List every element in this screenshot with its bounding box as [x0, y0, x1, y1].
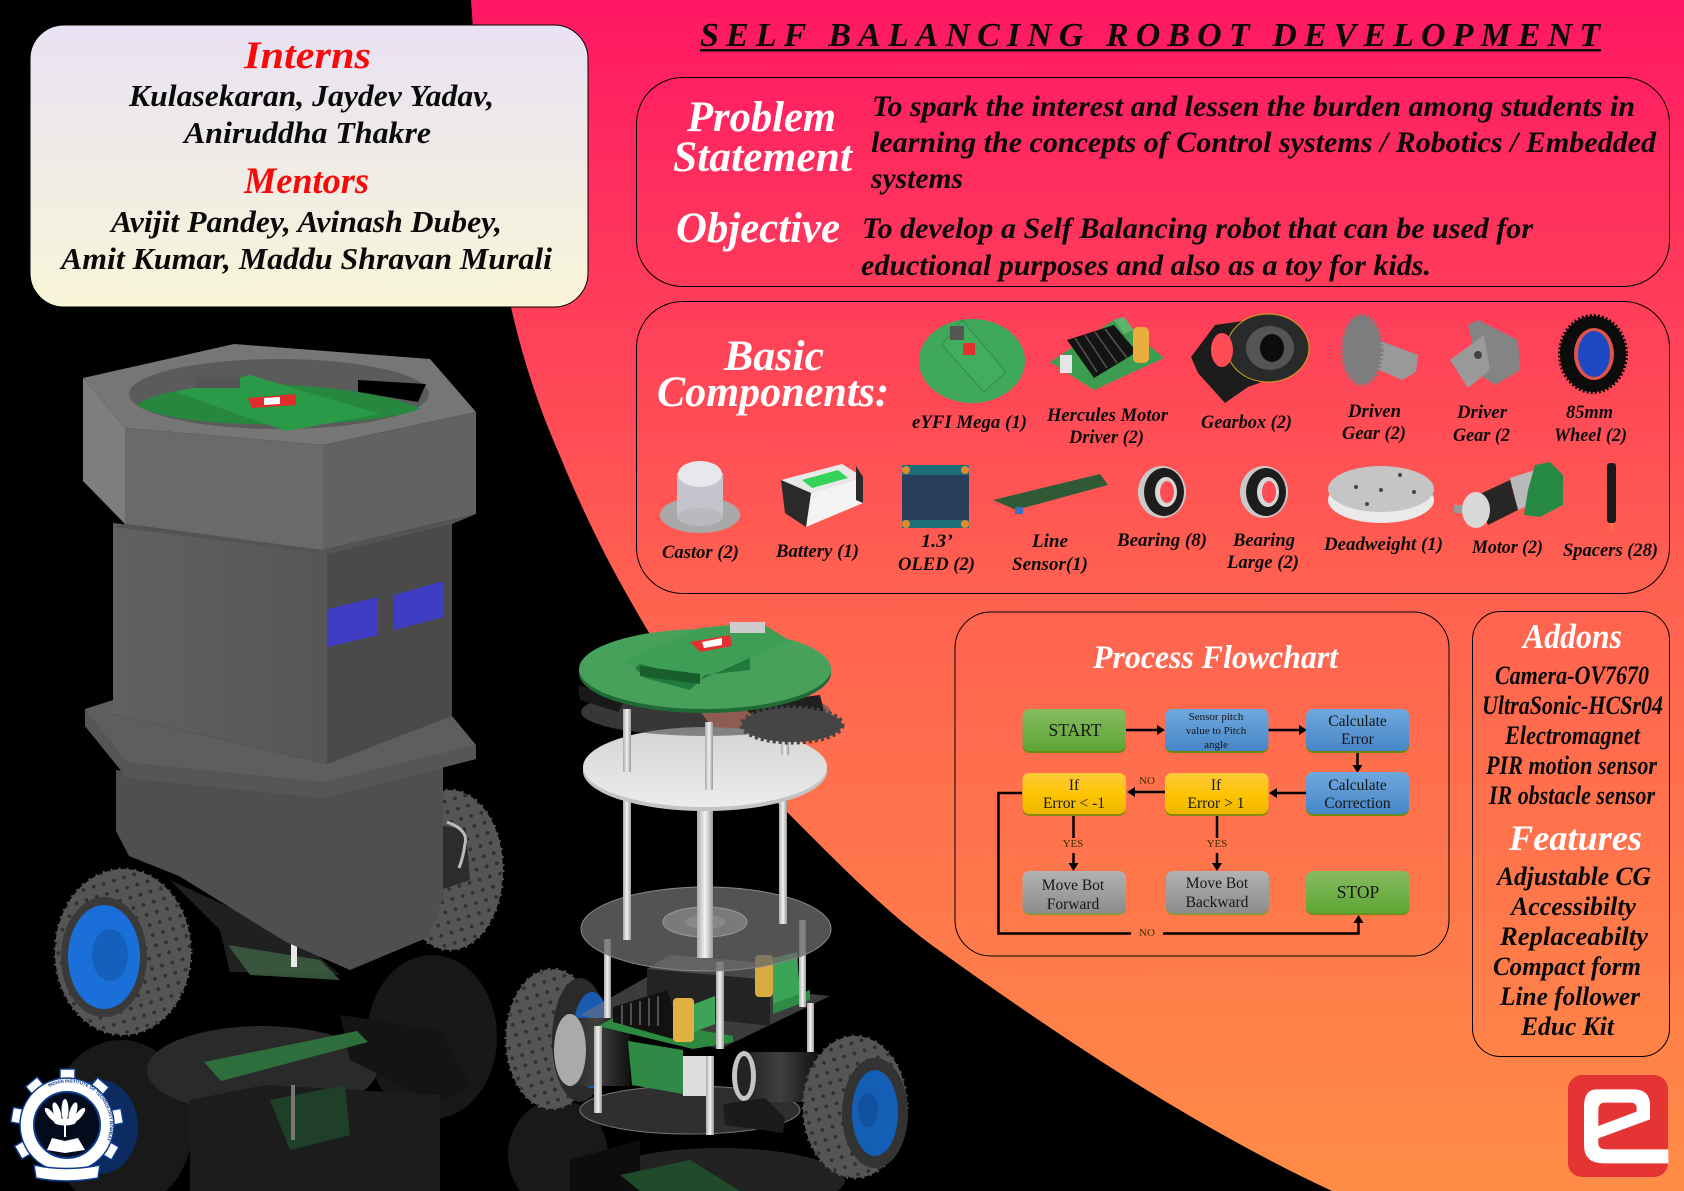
box: calculate correction	[1306, 772, 1409, 816]
box: if error greater than 1	[1165, 773, 1268, 816]
gearbox layer	[578, 685, 842, 790]
component: Motor: Motor (2)	[1471, 537, 1543, 558]
objective text	[861, 212, 1533, 282]
intern names: Kulasekaran, Jaydev Yadav,	[128, 78, 494, 113]
white disc	[583, 727, 827, 811]
component: OLED: 1.3’	[921, 531, 953, 552]
blue sensor windows	[328, 597, 378, 647]
box: move bot forward: Forward	[1047, 896, 1100, 913]
component: Wheel: Wheel (2)	[1554, 425, 1627, 446]
box: START	[1022, 709, 1126, 753]
enclosed robot render	[55, 344, 503, 1035]
heading: basic components	[657, 333, 889, 416]
features list: Line follower	[1499, 982, 1641, 1011]
component: Battery: Battery (1)	[775, 541, 859, 562]
box: START: START	[1049, 720, 1102, 740]
panel: interns and mentors	[30, 25, 588, 307]
gear outline	[11, 1069, 124, 1172]
component: Wheel: 85mm	[1566, 402, 1613, 423]
flow connectors	[998, 725, 1364, 934]
box: sensor pitch: angle	[1204, 739, 1228, 751]
box: calculate error	[1306, 709, 1409, 753]
component: Deadweight	[1323, 466, 1443, 555]
addons list: Camera-OV7670	[1495, 661, 1649, 690]
box: calculate error: Calculate	[1328, 713, 1387, 730]
features list: Replaceabilty	[1499, 922, 1648, 951]
objective text: eductional purposes and also as a toy for kids.	[861, 249, 1431, 282]
component: eYFI Mega: eYFI Mega (1)	[912, 412, 1027, 433]
component: Line Sensor: Line	[1031, 531, 1069, 552]
objective text: To develop a Self Balancing robot that can be used for	[862, 212, 1533, 245]
component: Castor	[660, 461, 740, 563]
motto ribbon	[34, 1165, 100, 1181]
panel: problem statement and objective	[636, 78, 1670, 286]
heading: problem statement: Statement	[673, 134, 854, 181]
mentor names	[59, 204, 552, 276]
heading: problem statement	[673, 94, 854, 181]
lower body	[116, 764, 443, 970]
component: Bearing Large: Large (2)	[1226, 552, 1299, 573]
component: OLED	[898, 465, 975, 575]
box: STOP	[1306, 871, 1410, 915]
flow labels: YES	[1207, 838, 1227, 850]
component: Motor	[1454, 462, 1563, 558]
component: Hercules Motor Driver: Hercules Motor	[1046, 405, 1169, 426]
heading: features: Features	[1508, 818, 1642, 858]
component: Hercules Motor Driver: Driver (2)	[1068, 427, 1144, 448]
box: move bot backward	[1166, 871, 1269, 915]
problem text: systems	[870, 162, 963, 195]
component: Castor: Castor (2)	[662, 542, 739, 563]
heading: problem statement: Problem	[686, 94, 836, 141]
component: Line Sensor: Sensor(1)	[1012, 554, 1088, 575]
reflection of enclosed robot	[49, 955, 497, 1191]
features list: Compact form	[1493, 952, 1641, 981]
exploded robot render	[506, 622, 908, 1178]
flow labels	[1063, 775, 1227, 939]
opening with green board	[129, 359, 429, 429]
ring text: INDIAN INSTITUTE OF TECHNOLOGY BOMBAY	[48, 1079, 114, 1142]
intern names	[128, 78, 494, 150]
rear wheel	[397, 790, 503, 950]
component: Bearing	[1116, 466, 1207, 551]
addons list: Electromagnet	[1504, 721, 1641, 750]
component: Line Sensor	[993, 474, 1108, 575]
component: Wheel	[1554, 316, 1627, 446]
component: Bearing: Bearing (8)	[1116, 530, 1207, 551]
box: if error less than -1	[1022, 773, 1126, 816]
component: Driver Gear: Gear (2	[1453, 425, 1510, 446]
box: if error less than -1: If	[1069, 777, 1080, 794]
title: SELF BALANCING ROBOT DEVELOPMENT	[700, 17, 1601, 54]
translucent gray disc	[581, 887, 831, 971]
box: sensor pitch	[1165, 709, 1268, 753]
box: sensor pitch: value to Pitch	[1186, 725, 1247, 737]
component: Driven Gear	[1342, 316, 1418, 444]
box: move bot backward: Move Bot	[1186, 875, 1249, 892]
component: Gearbox: Gearbox (2)	[1201, 412, 1292, 433]
box: calculate correction: Calculate	[1328, 777, 1387, 794]
component: OLED: OLED (2)	[898, 554, 975, 575]
addons list	[1482, 661, 1663, 810]
mentor names: Avijit Pandey, Avinash Dubey,	[109, 204, 502, 239]
component: eYFI Mega	[912, 319, 1027, 433]
heading: basic components: Basic	[723, 333, 824, 380]
box: move bot forward: Move Bot	[1042, 877, 1105, 894]
heading: addons: Addons	[1521, 617, 1622, 656]
intern names: Aniruddha Thakre	[182, 115, 431, 150]
middle body	[113, 523, 327, 764]
component: Gearbox	[1191, 314, 1309, 433]
component: Driven Gear: Driven	[1347, 401, 1401, 422]
features list: Educ Kit	[1520, 1012, 1615, 1041]
problem text	[870, 90, 1657, 195]
features list: Adjustable CG	[1495, 862, 1651, 891]
panel: addons and features	[1472, 612, 1670, 1056]
logo: IIT Bombay	[10, 1068, 138, 1182]
box: calculate correction: Correction	[1324, 795, 1391, 812]
long rods	[623, 798, 787, 958]
top octagon	[83, 344, 476, 445]
lotus and book	[43, 1099, 87, 1153]
mentor names: Amit Kumar, Maddu Shravan Murali	[59, 241, 552, 276]
component: Bearing Large: Bearing	[1232, 530, 1295, 551]
component: Driven Gear: Gear (2)	[1342, 423, 1406, 444]
panel: process flowchart	[955, 612, 1449, 956]
problem text: learning the concepts of Control systems / Robotics / Embedded	[871, 126, 1657, 159]
box: calculate error: Error	[1341, 731, 1375, 748]
flow labels: NO	[1139, 927, 1155, 939]
flange	[85, 700, 476, 798]
box: move bot backward: Backward	[1186, 894, 1249, 911]
component: Battery	[775, 464, 863, 562]
component: Spacers	[1563, 463, 1658, 561]
panel: basic components	[636, 302, 1670, 594]
logo: e-Yantra	[1568, 1075, 1668, 1177]
undercarriage	[170, 880, 340, 975]
front-left wheel	[55, 869, 191, 1035]
lower chassis	[506, 920, 908, 1178]
features list: Accessibilty	[1509, 892, 1636, 921]
component: Driver Gear: Driver	[1456, 402, 1508, 423]
heading: basic components: Components:	[657, 369, 889, 416]
component: Spacers: Spacers (28)	[1563, 540, 1658, 561]
box: if error greater than 1: If	[1211, 777, 1222, 794]
problem text: To spark the interest and lessen the burden among students in	[872, 90, 1635, 123]
reflection of exploded robot	[508, 1100, 845, 1191]
flow labels: NO	[1139, 775, 1155, 787]
heading: mentors: Mentors	[243, 161, 369, 202]
heading: process flowchart: Process Flowchart	[1092, 640, 1339, 676]
features list	[1493, 862, 1651, 1041]
component: Hercules Motor Driver	[1046, 317, 1169, 448]
box: move bot forward	[1022, 871, 1126, 915]
addons list: IR obstacle sensor	[1488, 781, 1656, 810]
box: STOP: STOP	[1337, 882, 1380, 902]
box: sensor pitch: Sensor pitch	[1189, 711, 1244, 723]
heading: interns: Interns	[243, 34, 371, 77]
heading: objective: Objective	[676, 205, 840, 252]
box: if error less than -1: Error < -1	[1043, 795, 1105, 812]
flow labels: YES	[1063, 838, 1083, 850]
box: if error greater than 1: Error > 1	[1188, 795, 1244, 812]
top green disc	[579, 622, 831, 713]
component: Bearing Large	[1226, 466, 1299, 573]
component: Deadweight: Deadweight (1)	[1323, 534, 1443, 555]
component: Driver Gear	[1450, 320, 1520, 446]
addons list: PIR motion sensor	[1485, 751, 1658, 780]
